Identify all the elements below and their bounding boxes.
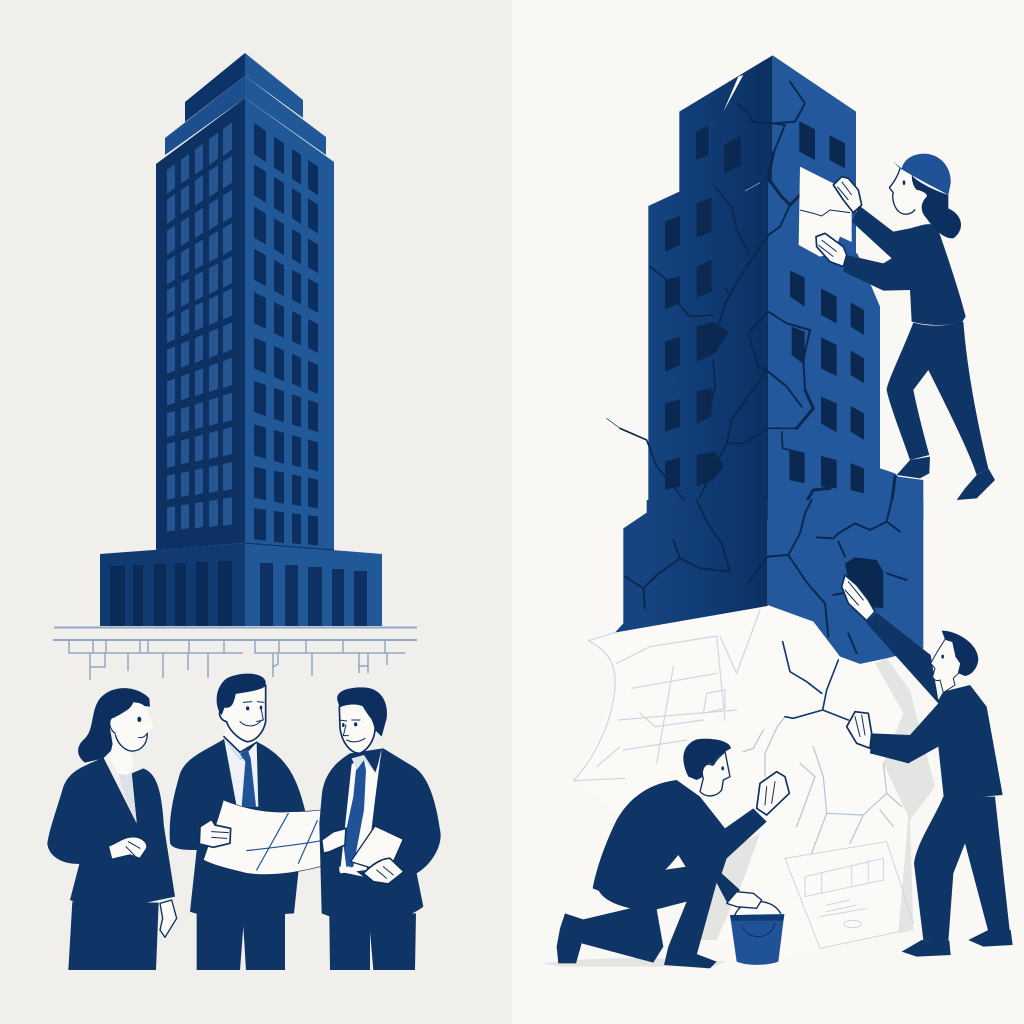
person: climbing woman: [816, 154, 995, 500]
man head: [217, 674, 266, 752]
roof fissure: [723, 75, 743, 112]
head: [700, 752, 730, 796]
person: woman in suit: [47, 688, 177, 970]
left face windows: [167, 122, 232, 535]
head: [889, 154, 961, 238]
foundation blueprint lines: [53, 628, 417, 680]
base cracks: [625, 500, 907, 653]
pants: [887, 322, 988, 475]
tower base blue face: [768, 500, 923, 664]
group: three colleagues reviewing plan: [47, 674, 441, 970]
tower left face: [156, 98, 245, 550]
broken wall hole: [845, 557, 883, 608]
upper hand: [833, 177, 862, 213]
roof second tier: [165, 76, 326, 155]
person: kneeling man: [557, 739, 789, 968]
right face windows: [789, 121, 864, 493]
rock shadow under kneeling man: [700, 833, 760, 940]
gap under jacket: [668, 857, 678, 868]
woman head: [78, 688, 153, 775]
panel: cracked tower: [607, 55, 995, 520]
head: [931, 639, 961, 693]
right face windows: [254, 123, 318, 548]
left face windows: [665, 126, 741, 490]
group: rock foundation and repair crew: [543, 500, 1013, 968]
white patch: [799, 167, 852, 257]
main rock crack: [783, 642, 848, 720]
shoes: [557, 913, 717, 968]
panel: left background: [0, 0, 512, 1024]
legs: [582, 867, 718, 963]
person: standing man: [842, 575, 1013, 957]
person: man with folder: [319, 687, 441, 970]
patch crack: [800, 210, 850, 216]
lower hand: [816, 233, 847, 267]
tower right face: [768, 55, 923, 520]
person: man holding plan: [170, 674, 353, 970]
panel: intact tower: [100, 53, 382, 626]
faded lower plan: [785, 842, 913, 948]
pale rock cracks: [743, 717, 902, 853]
rock body: [577, 606, 933, 959]
blueprint sheet: [203, 800, 353, 875]
shoes: [897, 457, 995, 500]
rock shadow: [875, 658, 935, 933]
roof top block: [185, 53, 303, 122]
wall fissure highlight: [745, 183, 760, 191]
jacket: [843, 206, 966, 325]
cracks: [607, 82, 895, 517]
man head: [337, 687, 387, 753]
tower right face: [245, 98, 334, 550]
tower podium: [100, 543, 382, 626]
panel: right background: [512, 0, 1024, 1024]
faded plan sketch: [573, 610, 760, 781]
ground shadow: [543, 958, 727, 967]
folder: [351, 826, 403, 873]
tower base dark face: [615, 500, 768, 633]
torso and arms: [593, 780, 767, 905]
tower left face: [648, 55, 773, 520]
bucket: [730, 902, 784, 965]
